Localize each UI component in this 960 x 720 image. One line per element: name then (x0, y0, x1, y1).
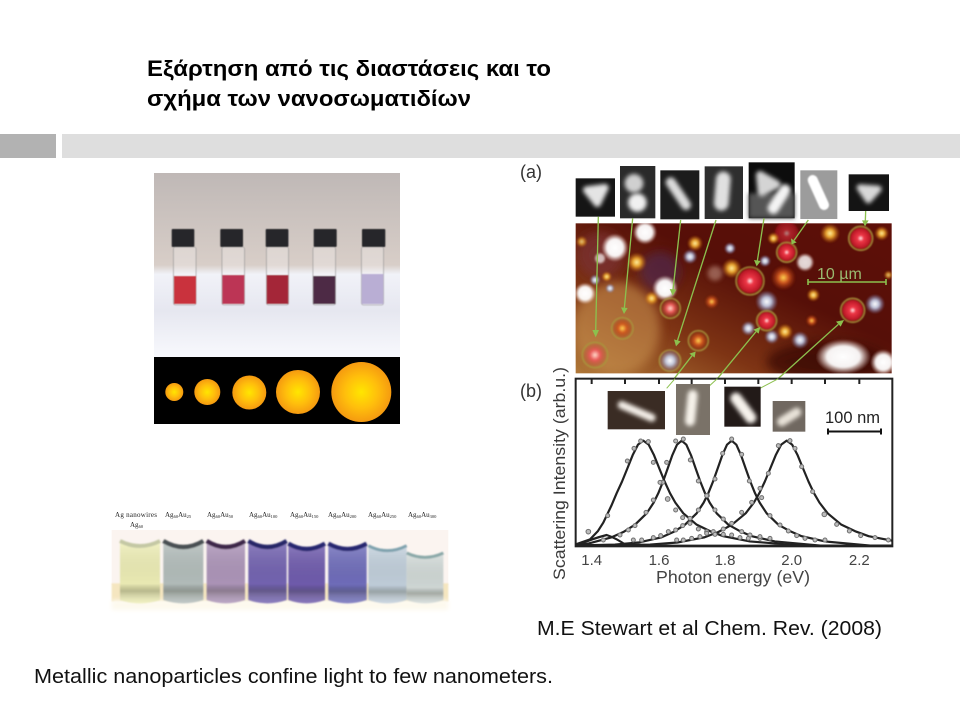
scale bar 100 nm: 100 nm (825, 409, 880, 427)
thumbnail 3 (660, 170, 699, 219)
plot frame (576, 379, 892, 546)
x axis tick labels: 1.8 (715, 552, 735, 569)
vial labels: 200 (350, 514, 357, 519)
x axis tick labels: 1.6 (649, 552, 669, 569)
vial 3 (266, 229, 288, 305)
thumbnail 1 (576, 178, 615, 217)
panel: scattering microscopy figure (521, 162, 894, 586)
thumbnail 7 (849, 174, 889, 211)
vial labels: Ag (130, 521, 139, 529)
vial labels: 60 (377, 514, 382, 519)
vial labels: 60 (174, 514, 179, 519)
x axis tick labels: 2.2 (849, 552, 870, 569)
panel: silver gold nanowire vials (112, 511, 448, 610)
vial labels: Au (421, 511, 430, 519)
vial labels: 60 (258, 514, 263, 519)
vial labels: Ag nanowires (115, 511, 157, 519)
vial 4 (313, 229, 337, 305)
thumbnail 4 (705, 166, 743, 219)
vial labels: 60 (139, 524, 144, 529)
data points (586, 437, 890, 542)
x axis tick labels: 1.4 (581, 552, 602, 569)
vial labels: 25 (187, 514, 192, 519)
vial labels: Au (381, 511, 390, 519)
vial row (112, 530, 448, 610)
x axis tick labels (581, 552, 870, 569)
vial labels: Au (303, 511, 312, 519)
scattering spectrum chart (550, 367, 960, 587)
label a: (a) (520, 162, 542, 182)
photo background (154, 173, 400, 357)
vial labels: Au (178, 511, 187, 519)
vial labels: Ag (328, 511, 337, 519)
vial labels: 60 (337, 514, 342, 519)
x axis tick labels: 2.0 (781, 552, 802, 569)
vial labels: Au (341, 511, 350, 519)
vial labels: Au (220, 511, 229, 519)
vial labels: Ag (165, 511, 174, 519)
spectra curves (576, 440, 892, 546)
vial labels: 60 (216, 514, 221, 519)
vial labels: 50 (229, 514, 234, 519)
dark field image (573, 220, 896, 382)
vial labels: 300 (430, 514, 437, 519)
citation: M.E Stewart et al Chem. Rev. (2008) (537, 618, 882, 640)
vial: Au25 (163, 541, 203, 603)
y axis title: Scattering Intensity (arb.u.) (550, 367, 569, 580)
header band (0, 134, 960, 158)
thumbnail rod 1 (608, 391, 665, 429)
panel: gold nanoparticle vials photo (154, 173, 400, 424)
vial 1 (172, 229, 196, 305)
vial 2 (220, 229, 244, 305)
vial: Au200 (328, 544, 367, 603)
vial: Au250 (368, 546, 407, 603)
green arrows (592, 211, 869, 395)
particle image row a (576, 162, 889, 219)
vial labels: Ag (408, 511, 417, 519)
thumbnail rod 2 (676, 384, 710, 435)
vial: Au300 (407, 553, 443, 603)
scale bar 100 nm (825, 409, 881, 434)
scale bar 10 um: 10 µm (817, 266, 862, 283)
vial labels: Au (262, 511, 271, 519)
particle size strip (154, 357, 400, 424)
vial: Au100 (248, 541, 287, 603)
thumbnail rod 3 (724, 387, 761, 427)
thumbnail rod 4 (773, 401, 805, 432)
circled particles (582, 226, 873, 371)
title (147, 56, 551, 111)
caption: Metallic nanoparticles confine light to few nanometers. (34, 666, 553, 688)
label b: (b) (520, 381, 542, 401)
thumbnail 5 (749, 162, 795, 218)
vial labels (115, 511, 437, 529)
title: σχήμα των νανοσωματιδίων (147, 86, 471, 111)
particle images row b (608, 384, 805, 435)
vial labels: Ag (290, 511, 299, 519)
thumbnail 6 (800, 170, 837, 219)
vial 5 (362, 229, 385, 305)
vial: Ag60 (120, 541, 160, 603)
vial: Au150 (288, 544, 325, 603)
background spots (573, 220, 896, 382)
thumbnail 2 (620, 166, 655, 218)
vial labels: 100 (271, 514, 278, 519)
x axis title: Photon energy (eV) (656, 567, 810, 587)
vial labels: 250 (390, 514, 397, 519)
vial labels: Ag (207, 511, 216, 519)
scale bar 10 um (808, 266, 886, 285)
vial: Au50 (207, 541, 245, 603)
vial labels: Ag (368, 511, 377, 519)
vial labels: 150 (312, 514, 319, 519)
vial labels: Ag (249, 511, 258, 519)
vial labels: 60 (299, 514, 304, 519)
title: Εξάρτηση από τις διαστάσεις και το (147, 56, 551, 81)
vial labels: 60 (417, 514, 422, 519)
